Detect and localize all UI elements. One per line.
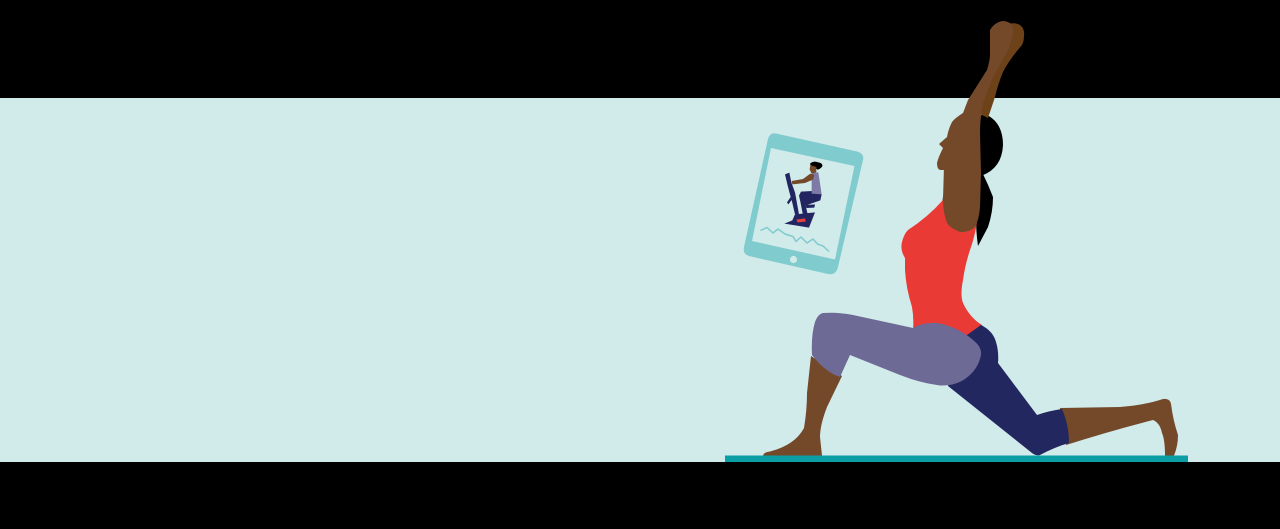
torso top	[901, 200, 982, 345]
rider leggings	[799, 191, 822, 218]
woman in lunge pose	[763, 21, 1178, 456]
rider face	[810, 165, 816, 174]
purple front thigh	[812, 313, 981, 386]
tablet body	[744, 133, 863, 274]
tablet screen	[752, 148, 854, 260]
tablet home button	[790, 256, 797, 263]
bike seat	[806, 204, 815, 208]
hair	[970, 114, 1003, 176]
bike base	[784, 212, 815, 228]
rider shoe	[796, 218, 806, 222]
rear foot	[1060, 399, 1178, 456]
front raised arm	[943, 21, 1013, 232]
head and face	[937, 113, 975, 182]
neck	[942, 168, 972, 210]
icon: tablet showing exercise bike workout	[744, 133, 863, 274]
rider arm	[792, 174, 814, 184]
rider hair	[810, 162, 822, 170]
bike column and handlebar	[785, 173, 799, 214]
ponytail	[976, 172, 993, 246]
exercise mat	[725, 456, 1188, 462]
rear raised arm	[972, 23, 1024, 118]
navy rear leg	[948, 325, 1069, 455]
rider shirt	[812, 172, 822, 194]
activity line chart	[760, 228, 829, 252]
rider on exercise bike	[784, 162, 822, 228]
panel: pale teal background	[0, 98, 1280, 462]
front lower leg and foot	[763, 356, 842, 456]
